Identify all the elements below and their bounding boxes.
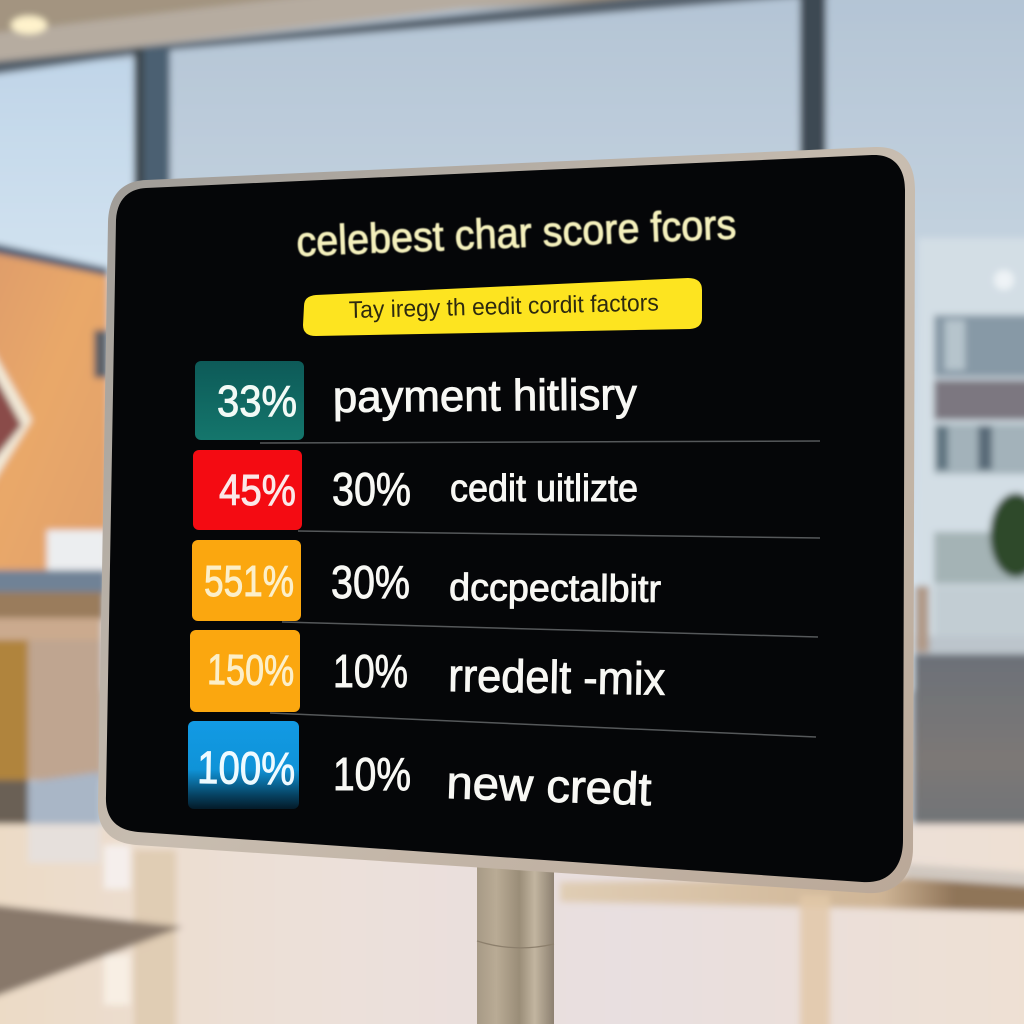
title: celebest char score fcors: [295, 200, 737, 265]
row 5: new credit: 10%: [333, 748, 411, 800]
support pole: [477, 860, 554, 1024]
row 4: credit mix: 10%: [333, 645, 408, 697]
row 5: new credit: new credt: [446, 756, 653, 815]
floor reflections: [134, 850, 176, 1024]
row 2: credit utilization: 30%: [332, 463, 411, 515]
window sill: [560, 878, 1024, 912]
sign panel: [98, 147, 915, 893]
row 2: credit utilization: [193, 450, 638, 530]
window column left: [136, 48, 170, 208]
ceiling band: [0, 0, 800, 40]
row 3: dependability: 551%: [204, 557, 294, 606]
row 1: payment history: [195, 361, 637, 440]
row 3: dependability: 30%: [331, 556, 410, 608]
row 1: payment history: 33%: [217, 377, 297, 426]
row 4: credit mix: [190, 630, 666, 712]
subtitle banner: [303, 278, 702, 336]
rug: [0, 902, 183, 1006]
dark ledge: [0, 570, 106, 594]
row 3: dependability: [192, 540, 662, 621]
sign frame: [98, 147, 915, 893]
right building: [918, 238, 1024, 658]
row 1: payment history: payment hitlisry: [333, 370, 637, 422]
window sky: [0, 0, 1024, 690]
monitor on counter: [47, 530, 107, 582]
counter: [0, 592, 104, 620]
row 5: new credit: [188, 721, 653, 815]
sign screen: [106, 155, 905, 882]
row 2: credit utilization: cedit uitlizte: [450, 468, 638, 510]
floor: [0, 824, 1024, 1024]
row 4: credit mix: rredelt -mix: [448, 649, 666, 705]
row 5: new credit: 100%: [197, 741, 296, 795]
street: [914, 650, 1024, 872]
subtitle banner: Tay iregy th eedit cordit factors: [348, 289, 659, 324]
row 2: credit utilization: 45%: [219, 466, 296, 515]
row 3: dependability: dccpectalbitr: [449, 567, 662, 611]
orange building: [0, 238, 108, 580]
window column right: [800, 0, 826, 170]
ceiling light: [11, 16, 47, 34]
tree: [990, 493, 1024, 577]
row 4: credit mix: 150%: [207, 646, 295, 696]
